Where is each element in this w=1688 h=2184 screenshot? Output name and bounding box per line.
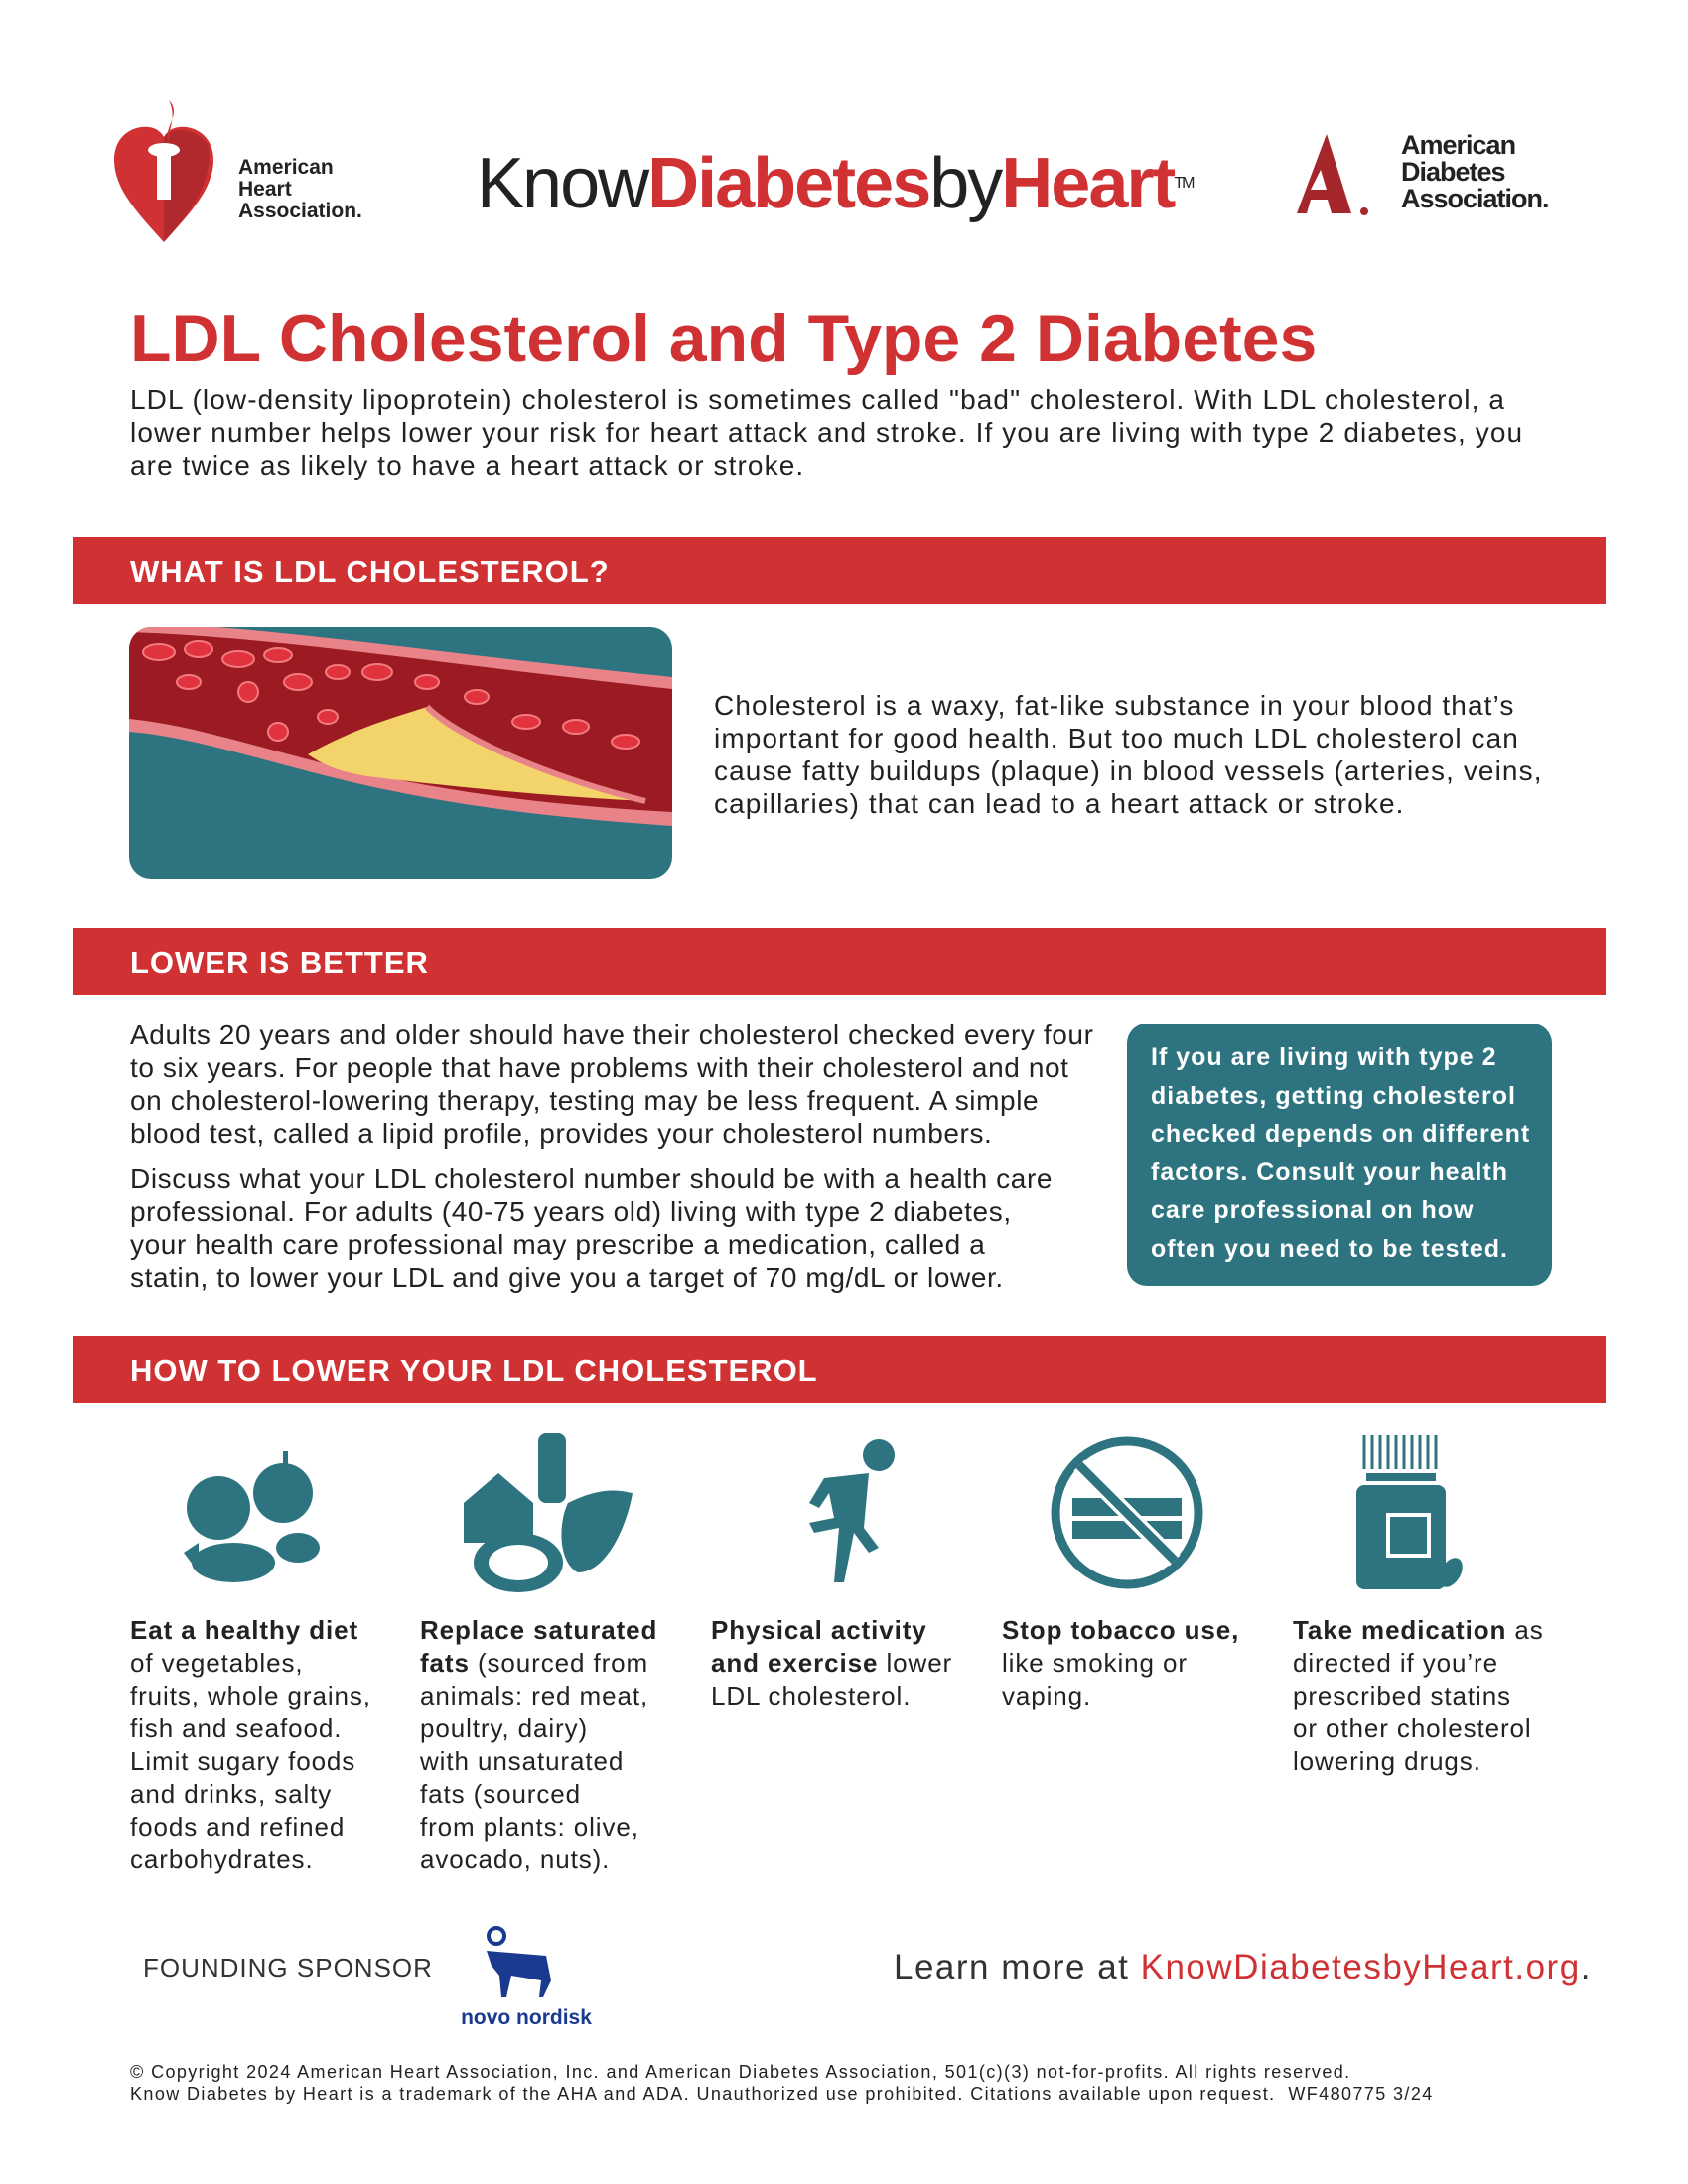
column: replace fats: with unsaturated xyxy=(420,1746,624,1776)
column: healthy diet xyxy=(130,1615,371,1874)
text: testing paragraphs xyxy=(130,1020,1094,1293)
column: healthy diet: fruits, whole grains, xyxy=(130,1681,371,1710)
column: stop tobacco: like smoking or xyxy=(1002,1648,1188,1678)
column: healthy diet: and drinks, salty xyxy=(130,1779,332,1809)
column: healthy diet: foods and refined xyxy=(130,1812,345,1842)
text: cholesterol definition: capillaries) that can lead to a heart attack or stroke. xyxy=(714,788,1404,819)
text: testing paragraphs: statin, to lower your LDL and give you a target of 70 mg/dL or lower. xyxy=(130,1262,1004,1293)
text: testing paragraphs: your health care professional may prescribe a medication, called a xyxy=(130,1229,985,1260)
callout: teal box: If you are living with type 2 xyxy=(1151,1043,1497,1071)
intro text xyxy=(130,384,1523,480)
text: testing paragraphs: professional. For adults (40-75 years old) living with type 2 diabetes, xyxy=(130,1196,1012,1227)
icon: meat and dairy xyxy=(464,1433,633,1592)
column: replace fats: fats (sourced xyxy=(420,1779,581,1809)
logo: American Heart Association: Association. xyxy=(238,200,362,222)
logo: American Diabetes Association: Association. xyxy=(1401,184,1549,213)
text: testing paragraphs: blood test, called a lipid profile, provides your cholesterol numbers. Discuss what your LDL cholesterol number should be with a health care xyxy=(130,1118,1053,1194)
copyright: © Copyright 2024 American Heart Association, Inc. and American Diabetes Association, 501(c)(3) not-for-profits. All rights reserved. xyxy=(130,2062,1351,2082)
column: medication: directed if you’re xyxy=(1293,1648,1498,1678)
column: replace fats: avocado, nuts). xyxy=(420,1844,610,1874)
text: testing paragraphs: to six years. For people that have problems with their cholesterol and not xyxy=(130,1052,1069,1083)
logo: American Diabetes Association: Diabetes xyxy=(1401,157,1505,187)
column: healthy diet: carbohydrates. xyxy=(130,1844,314,1874)
copyright: Know Diabetes by Heart is a trademark of the AHA and ADA. Unauthorized use prohibited. Citations available upon request. WF480775 3/24 xyxy=(130,2084,1434,2104)
intro text: are twice as likely to have a heart attack or stroke. xyxy=(130,450,804,480)
text: cholesterol definition xyxy=(714,690,1543,819)
logo: American Diabetes Association xyxy=(1297,130,1549,215)
founding sponsor: FOUNDING SPONSOR xyxy=(143,1953,433,1982)
logo: American Heart Association xyxy=(114,100,362,242)
column: medication: Take medication as xyxy=(1293,1615,1544,1645)
column: medication: prescribed statins xyxy=(1293,1681,1511,1710)
intro text: LDL (low-density lipoprotein) cholesterol is sometimes called "bad" cholesterol. With LDL cholesterol, a xyxy=(130,384,1505,415)
section header: how to lower: HOW TO LOWER YOUR LDL CHOLESTEROL xyxy=(130,1353,818,1388)
column: medication xyxy=(1293,1615,1544,1776)
icon: medication bottle xyxy=(1356,1435,1463,1589)
column: healthy diet: of vegetables, xyxy=(130,1648,304,1678)
section header: lower is better: LOWER IS BETTER xyxy=(130,945,429,980)
callout: teal box: care professional on how xyxy=(1151,1196,1474,1224)
column: replace fats: animals: red meat, xyxy=(420,1681,648,1710)
text: cholesterol definition: cause fatty buildups (plaque) in blood vessels (arteries, veins, xyxy=(714,755,1543,786)
logo: American Diabetes Association: American xyxy=(1401,130,1515,160)
text: testing paragraphs: on cholesterol-lowering therapy, testing may be less frequent. A simple xyxy=(130,1085,1039,1116)
callout: teal box: factors. Consult your health xyxy=(1151,1158,1508,1185)
callout: teal box: often you need to be tested. xyxy=(1151,1235,1508,1263)
callout: teal box: diabetes, getting cholesterol xyxy=(1151,1082,1516,1110)
callout: teal box: checked depends on different xyxy=(1151,1120,1530,1148)
column: stop tobacco xyxy=(1002,1615,1239,1710)
logo: novo nordisk: novo nordisk xyxy=(461,2006,592,2029)
text: testing paragraphs: Adults 20 years and older should have their cholesterol checked every four xyxy=(130,1020,1094,1050)
section header: lower is better xyxy=(73,928,1606,995)
column: healthy diet: Eat a healthy diet xyxy=(130,1615,358,1645)
logo: American Heart Association: Heart xyxy=(238,178,292,201)
text: cholesterol definition: important for good health. But too much LDL cholesterol can xyxy=(714,723,1519,753)
copyright xyxy=(130,2062,1434,2104)
illustration: artery with plaque xyxy=(129,627,672,879)
icon: fruits and vegetables xyxy=(184,1451,320,1582)
section header: what is LDL: WHAT IS LDL CHOLESTEROL? xyxy=(130,554,610,589)
column: replace fats: Replace saturated xyxy=(420,1615,657,1645)
column: replace fats: poultry, dairy) xyxy=(420,1713,588,1743)
text: cholesterol definition: Cholesterol is a waxy, fat-like substance in your blood that’s xyxy=(714,690,1514,721)
learn more link: Learn more at KnowDiabetesbyHeart.org. xyxy=(894,1948,1592,1986)
column: replace fats xyxy=(420,1615,657,1874)
icon: no smoking xyxy=(1051,1437,1203,1588)
logo: novo nordisk xyxy=(461,1926,592,2029)
column: stop tobacco: vaping. xyxy=(1002,1681,1091,1710)
column: physical activity: and exercise lower xyxy=(711,1648,952,1678)
section header: how to lower xyxy=(73,1336,1606,1403)
column: physical activity: LDL cholesterol. xyxy=(711,1681,911,1710)
column: physical activity xyxy=(711,1615,952,1710)
column: replace fats: fats (sourced from xyxy=(420,1648,648,1678)
column: stop tobacco: Stop tobacco use, xyxy=(1002,1615,1239,1645)
logo: Know Diabetes by Heart: KnowDiabetesbyHeartTM xyxy=(477,144,1193,223)
column: healthy diet: fish and seafood. xyxy=(130,1713,342,1743)
column: healthy diet: Limit sugary foods xyxy=(130,1746,355,1776)
logo: American Heart Association: American xyxy=(238,156,334,179)
icon: runner xyxy=(809,1439,895,1582)
column: physical activity: Physical activity xyxy=(711,1615,927,1645)
column: medication: or other cholesterol xyxy=(1293,1713,1532,1743)
title: LDL Cholesterol and Type 2 Diabetes xyxy=(130,301,1317,376)
section header: what is LDL xyxy=(73,537,1606,604)
column: medication: lowering drugs. xyxy=(1293,1746,1481,1776)
callout: teal box xyxy=(1127,1024,1552,1286)
intro text: lower number helps lower your risk for heart attack and stroke. If you are living with type 2 diabetes, you xyxy=(130,417,1523,448)
column: replace fats: from plants: olive, xyxy=(420,1812,639,1842)
